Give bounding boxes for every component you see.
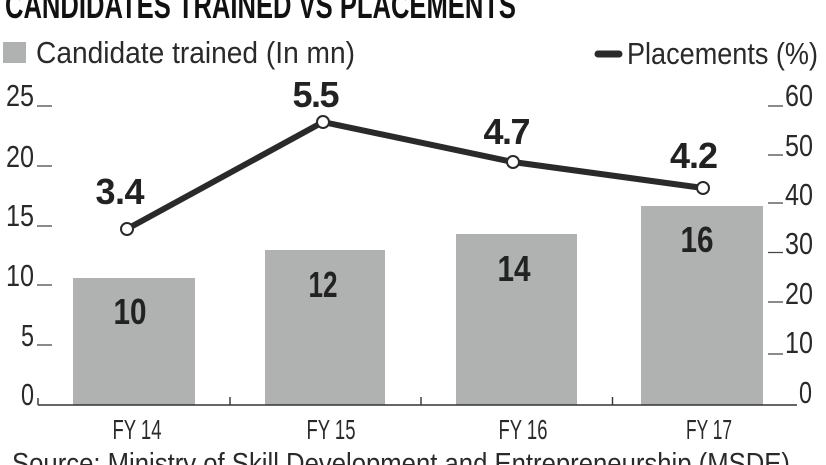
line value labels: 5.5 <box>292 74 340 115</box>
bar value labels: 14 <box>498 248 530 289</box>
bar: FY 14 <box>73 278 195 405</box>
left axis: candidates trained <box>6 78 52 412</box>
left axis: candidates trained: 20 <box>6 139 34 174</box>
left axis: candidates trained: 25 <box>6 78 34 113</box>
line value labels <box>96 74 718 212</box>
x axis labels: FY 15 <box>306 414 356 445</box>
bars <box>73 206 763 405</box>
right axis: placements: 40 <box>785 177 813 212</box>
line value labels: 4.7 <box>484 111 530 152</box>
right axis: placements: 0 <box>799 375 812 410</box>
right axis: placements: 10 <box>785 325 813 360</box>
right axis: placements: 50 <box>785 128 813 163</box>
x axis labels: FY 16 <box>498 414 548 445</box>
x axis labels: FY 17 <box>686 414 732 445</box>
left axis: candidates trained: 15 <box>6 198 34 233</box>
right axis: placements: 20 <box>785 276 813 311</box>
right axis: placements <box>768 78 813 410</box>
x axis labels <box>112 414 732 445</box>
line value labels: 4.2 <box>670 135 718 176</box>
left axis: candidates trained: 5 <box>21 318 34 353</box>
bar: FY 17 <box>641 206 763 405</box>
left axis: candidates trained: 0 <box>21 377 34 412</box>
bar value labels: 10 <box>114 291 146 332</box>
x axis labels: FY 14 <box>112 414 162 445</box>
line: placements <box>121 116 709 235</box>
bar: FY 16 <box>456 234 577 405</box>
line value labels: 3.4 <box>96 171 144 212</box>
right axis: placements: 30 <box>785 226 813 261</box>
bar value labels: 12 <box>308 264 338 305</box>
bar value labels <box>114 219 714 332</box>
bar value labels: 16 <box>680 219 714 260</box>
left axis: candidates trained: 10 <box>6 258 34 293</box>
baseline axis <box>38 397 797 405</box>
legend: candidates trained: Candidate trained (In mn) <box>36 35 355 70</box>
right axis: placements: 60 <box>785 78 813 113</box>
bar: FY 15 <box>265 250 385 405</box>
